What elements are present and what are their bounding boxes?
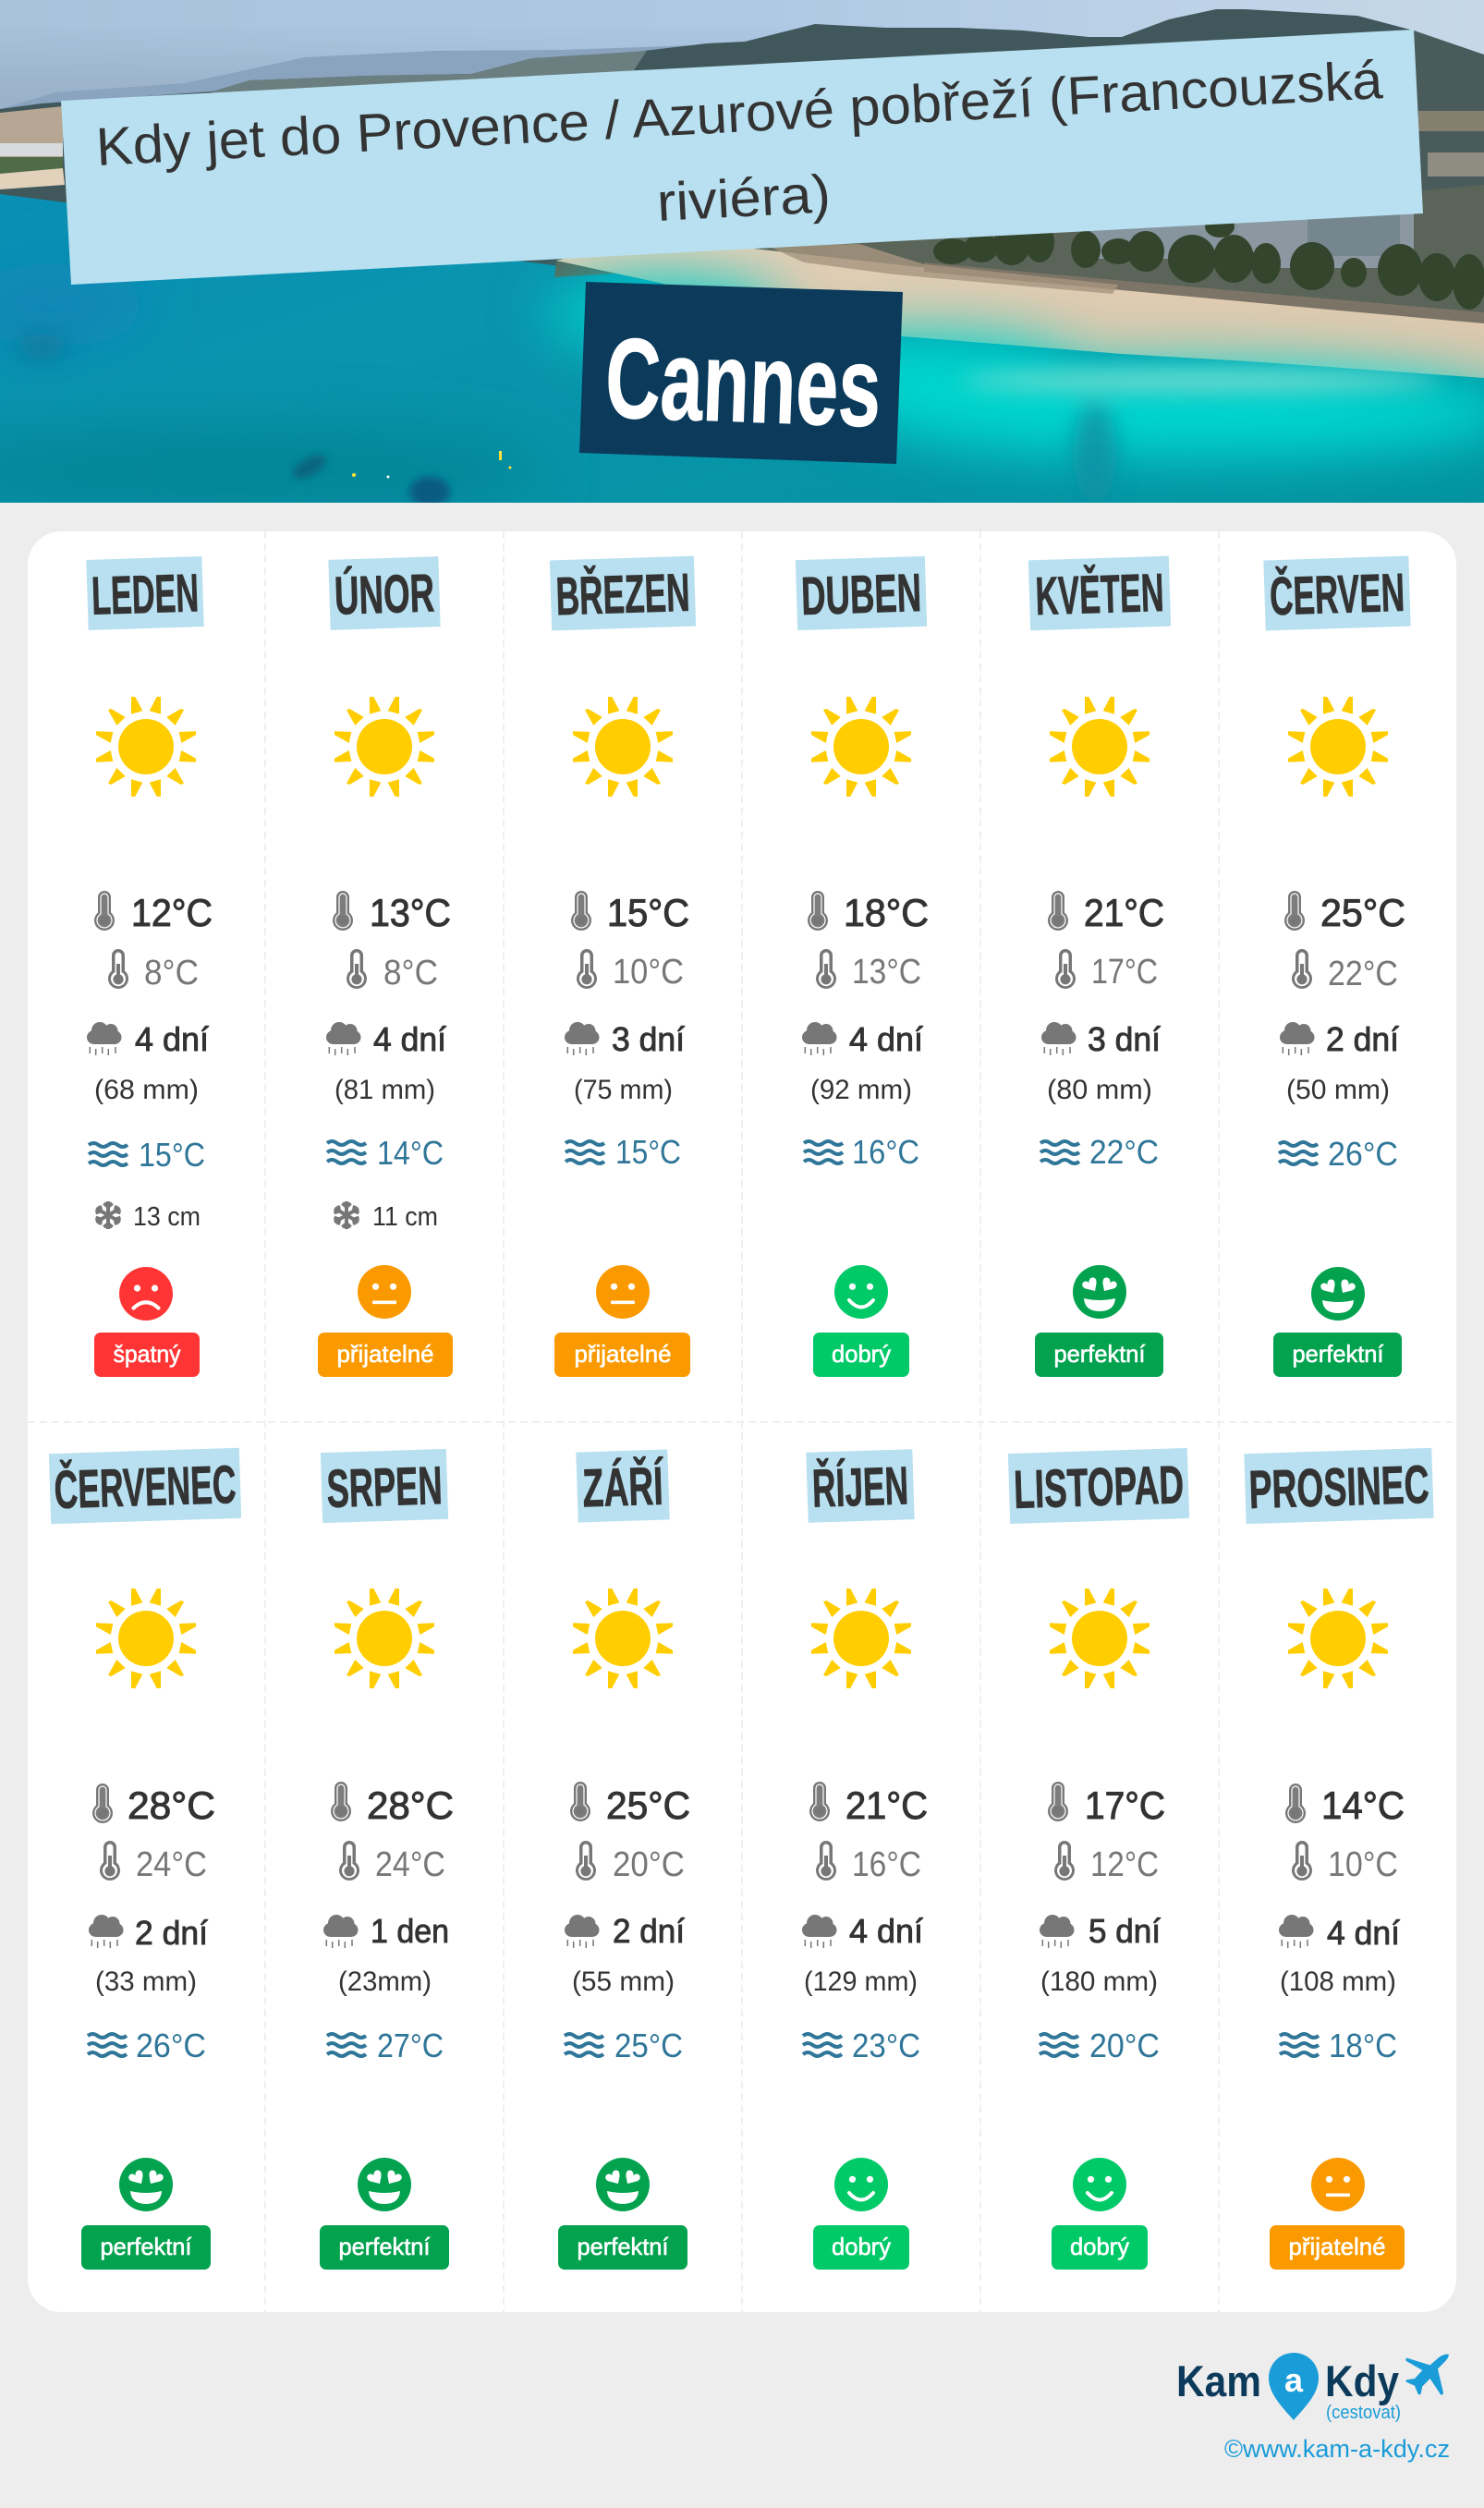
rainfall: (80 mm) xyxy=(1047,1075,1152,1105)
max temperature xyxy=(331,1782,454,1827)
max temperature: 28°C xyxy=(367,1784,454,1827)
icon: sun xyxy=(96,1589,196,1688)
rating badge: perfektní xyxy=(100,2233,192,2260)
heading: ZÁŘÍ xyxy=(576,1449,670,1523)
sea temperature: 23°C xyxy=(852,2027,920,2064)
icon: sun xyxy=(1050,1589,1149,1688)
max temperature: 25°C xyxy=(1320,891,1405,934)
logo word: Kam: Kam xyxy=(1176,2356,1261,2405)
max temperature xyxy=(808,891,929,934)
logo: Kam a Kdy xyxy=(1176,2353,1449,2423)
sea temperature: 22°C xyxy=(1089,1133,1159,1171)
sea temperature xyxy=(88,2027,206,2064)
max temperature xyxy=(809,1782,928,1827)
rainfall: (108 mm) xyxy=(1280,1966,1396,1997)
sea temperature: 25°C xyxy=(614,2027,683,2064)
month panel: ZÁŘÍ xyxy=(558,1449,690,2270)
rating badge xyxy=(813,2225,909,2270)
month panel: LISTOPAD xyxy=(1008,1448,1189,2270)
icon: sun xyxy=(573,1589,673,1688)
sea temperature xyxy=(1040,2027,1160,2064)
icon: sun xyxy=(573,697,673,797)
heading: SRPEN xyxy=(321,1449,448,1523)
rating badge: špatný xyxy=(113,1340,181,1368)
rainy days: 2 dní xyxy=(613,1912,685,1950)
rainy days xyxy=(323,1912,449,1950)
sea temperature: 26°C xyxy=(1328,1135,1398,1173)
icon: sun xyxy=(1288,697,1388,797)
rainy days: 4 dní xyxy=(849,1912,923,1950)
city title: Cannes: Cannes xyxy=(603,315,883,451)
rainfall: (75 mm) xyxy=(574,1075,673,1105)
rainy days xyxy=(326,1020,446,1058)
rating badge: dobrý xyxy=(1070,2233,1129,2260)
sea temperature xyxy=(1279,1135,1398,1173)
heading: BŘEZEN xyxy=(550,556,696,630)
min temperature xyxy=(100,1841,207,1884)
rainy days: 1 den xyxy=(371,1912,449,1950)
rating badge: perfektní xyxy=(577,2233,669,2260)
icon: heart-eyes face xyxy=(1311,1267,1365,1321)
rating badge xyxy=(1273,1333,1402,1377)
month panel: ČERVEN xyxy=(1263,556,1411,1377)
rating badge: perfektní xyxy=(1292,1340,1384,1368)
min temperature: 20°C xyxy=(613,1845,685,1884)
sea temperature: 15°C xyxy=(615,1133,681,1171)
rating badge: perfektní xyxy=(1053,1340,1146,1368)
sea temperature xyxy=(803,2027,920,2064)
min temperature xyxy=(1292,949,1398,993)
rainfall: (50 mm) xyxy=(1286,1075,1390,1105)
month panel: ČERVENEC xyxy=(49,1448,241,2270)
min temperature xyxy=(816,1841,921,1884)
icon: location pin xyxy=(1269,2353,1319,2420)
sea temperature: 20°C xyxy=(1089,2027,1160,2064)
max temperature xyxy=(1048,1782,1165,1827)
rainy days xyxy=(1280,1020,1399,1058)
rainy days: 3 dní xyxy=(1088,1020,1161,1058)
max temperature xyxy=(1048,891,1164,934)
icon: neutral face xyxy=(596,1265,650,1319)
icon: heart-eyes face xyxy=(596,2158,650,2211)
rainy days: 5 dní xyxy=(1089,1912,1161,1950)
rainfall: (33 mm) xyxy=(95,1966,197,1997)
rainfall: (92 mm) xyxy=(810,1075,912,1105)
rainy days: 4 dní xyxy=(849,1020,923,1058)
rainfall: (180 mm) xyxy=(1040,1966,1158,1997)
rainy days: 2 dní xyxy=(1326,1020,1399,1058)
rating badge: přijatelné xyxy=(336,1340,434,1368)
rainy days xyxy=(802,1912,923,1950)
max temperature xyxy=(333,891,451,934)
rating badge xyxy=(1270,2225,1405,2270)
max temperature: 15°C xyxy=(607,891,689,934)
month panel: LEDEN xyxy=(86,556,213,1377)
max temperature xyxy=(1285,1784,1405,1827)
rating badge: dobrý xyxy=(832,1340,891,1368)
logo word: Kdy: Kdy xyxy=(1325,2356,1399,2405)
min temperature xyxy=(347,949,438,992)
heading: LISTOPAD xyxy=(1008,1448,1189,1524)
sea temperature xyxy=(565,2027,683,2064)
max temperature: 13°C xyxy=(370,891,451,934)
heading: ČERVENEC: ČERVENEC xyxy=(54,1455,237,1520)
heading: KVĚTEN: KVĚTEN xyxy=(1035,563,1165,627)
heading: ÚNOR xyxy=(328,556,441,630)
rainfall: (129 mm) xyxy=(804,1966,918,1997)
sea temperature xyxy=(89,1136,205,1174)
max temperature: 17°C xyxy=(1085,1784,1165,1827)
min temperature xyxy=(577,949,684,992)
sea temperature xyxy=(1040,1133,1159,1171)
rainy days xyxy=(89,1914,208,1952)
rating badge xyxy=(554,1333,690,1377)
min temperature: 12°C xyxy=(1090,1845,1159,1884)
heading: BŘEZEN: BŘEZEN xyxy=(555,563,691,627)
heading: LEDEN xyxy=(86,556,204,630)
snow: 11 cm xyxy=(372,1202,438,1232)
month panel: KVĚTEN xyxy=(1028,556,1171,1377)
sea temperature xyxy=(566,1133,681,1171)
heading: ČERVEN xyxy=(1263,556,1411,630)
rating badge xyxy=(1035,1333,1163,1377)
icon: neutral face xyxy=(1311,2158,1365,2211)
max temperature: 18°C xyxy=(844,891,929,934)
rating badge xyxy=(558,2225,687,2270)
icon: neutral face xyxy=(358,1265,411,1319)
max temperature xyxy=(1284,891,1405,934)
heading: ČERVENEC xyxy=(49,1448,241,1524)
sea temperature: 26°C xyxy=(136,2027,206,2064)
rating badge: přijatelné xyxy=(1288,2233,1386,2260)
rating badge: přijatelné xyxy=(575,1340,671,1368)
max temperature xyxy=(570,1782,690,1827)
heading: SRPEN: SRPEN xyxy=(326,1455,444,1519)
heading: ÚNOR: ÚNOR xyxy=(334,563,435,627)
snow xyxy=(333,1201,438,1232)
max temperature: 12°C xyxy=(131,891,213,934)
icon: sun xyxy=(811,697,911,797)
month panel: ÚNOR xyxy=(318,556,453,1377)
month panel: SRPEN xyxy=(320,1449,454,2270)
min temperature: 8°C xyxy=(144,954,199,992)
max temperature: 14°C xyxy=(1321,1784,1405,1827)
heading: LISTOPAD: LISTOPAD xyxy=(1013,1455,1185,1520)
min temperature xyxy=(339,1841,445,1884)
rainy days xyxy=(1041,1020,1161,1058)
rainfall: (81 mm) xyxy=(335,1075,435,1105)
min temperature: 16°C xyxy=(852,1845,921,1884)
icon: sun xyxy=(1288,1589,1388,1688)
min temperature: 24°C xyxy=(375,1845,445,1884)
icon: sun xyxy=(335,1589,434,1688)
rating badge: perfektní xyxy=(338,2233,431,2260)
title line 1: Kdy jet do Provence / Azurové pobřeží (Francouzská xyxy=(94,50,1385,177)
icon: heart-eyes face xyxy=(1073,1265,1126,1319)
icon: heart-eyes face xyxy=(358,2158,411,2211)
sea temperature xyxy=(804,1133,919,1171)
icon: happy face xyxy=(834,1265,888,1319)
min temperature: 10°C xyxy=(613,953,684,992)
max temperature: 21°C xyxy=(1084,891,1164,934)
sea temperature: 15°C xyxy=(139,1136,205,1174)
rating badge xyxy=(1052,2225,1148,2270)
month panel: DUBEN xyxy=(796,556,929,1377)
rating badge xyxy=(813,1333,909,1377)
month panel: PROSINEC xyxy=(1244,1448,1434,2270)
max temperature: 25°C xyxy=(606,1784,690,1827)
rainy days xyxy=(565,1020,685,1058)
min temperature xyxy=(1055,949,1158,992)
max temperature: 21°C xyxy=(845,1784,928,1827)
icon: heart-eyes face xyxy=(119,2158,173,2211)
min temperature: 17°C xyxy=(1091,953,1158,992)
heading: KVĚTEN xyxy=(1028,556,1171,630)
sea temperature xyxy=(1280,2027,1397,2064)
min temperature: 24°C xyxy=(136,1845,207,1884)
month panel: BŘEZEN xyxy=(550,556,696,1377)
snow: 13 cm xyxy=(133,1202,201,1232)
heading: DUBEN xyxy=(796,556,927,630)
sea temperature xyxy=(327,1134,444,1172)
title banner xyxy=(61,30,1423,285)
rating badge xyxy=(320,2225,449,2270)
min temperature: 13°C xyxy=(852,953,921,992)
min temperature xyxy=(1054,1841,1159,1884)
min temperature xyxy=(1292,1841,1398,1884)
min temperature xyxy=(576,1841,685,1884)
logo subtitle: (cestovat) xyxy=(1326,2403,1401,2423)
min temperature: 10°C xyxy=(1328,1845,1398,1884)
min temperature xyxy=(108,949,199,992)
hero photo: Cannes coast xyxy=(0,0,1484,517)
website credit: ©www.kam-a-kdy.cz xyxy=(1224,2435,1450,2463)
icon: happy face xyxy=(834,2158,888,2211)
icon: sun xyxy=(96,697,196,797)
rainfall: (23mm) xyxy=(338,1966,432,1997)
heading: ŘÍJEN: ŘÍJEN xyxy=(811,1455,909,1519)
min temperature xyxy=(816,949,921,992)
sea temperature: 27°C xyxy=(377,2027,444,2064)
min temperature: 8°C xyxy=(383,954,438,992)
max temperature: 28°C xyxy=(128,1784,215,1827)
heading: DUBEN: DUBEN xyxy=(800,563,922,627)
month panel: ŘÍJEN xyxy=(802,1449,928,2270)
sea temperature: 18°C xyxy=(1329,2027,1397,2064)
max temperature xyxy=(571,891,689,934)
rating badge xyxy=(318,1333,453,1377)
min temperature: 22°C xyxy=(1328,955,1398,993)
max temperature xyxy=(94,891,213,934)
rating badge xyxy=(81,2225,211,2270)
icon: happy face xyxy=(1073,2158,1126,2211)
heading: LEDEN: LEDEN xyxy=(91,563,200,627)
rainfall: (68 mm) xyxy=(94,1075,199,1105)
city title: Cannes xyxy=(579,282,903,464)
heading: ZÁŘÍ: ZÁŘÍ xyxy=(582,1456,665,1518)
icon: sad face xyxy=(119,1267,173,1321)
rainy days: 4 dní xyxy=(373,1020,446,1058)
rainy days xyxy=(87,1020,209,1058)
icon: sun xyxy=(335,697,434,797)
title line 2: riviéra) xyxy=(655,164,832,233)
heading: ŘÍJEN xyxy=(806,1449,915,1523)
rainy days xyxy=(802,1020,923,1058)
snow xyxy=(94,1201,201,1232)
icon: airplane xyxy=(1405,2354,1449,2395)
rainy days: 4 dní xyxy=(1327,1914,1400,1952)
rainy days xyxy=(1040,1912,1161,1950)
sea temperature: 16°C xyxy=(852,1133,919,1171)
rainy days xyxy=(565,1912,685,1950)
rainy days xyxy=(1279,1914,1400,1952)
rainy days: 4 dní xyxy=(135,1020,209,1058)
rainy days: 2 dní xyxy=(135,1914,208,1952)
icon: sun xyxy=(1050,697,1149,797)
rating badge xyxy=(94,1333,200,1377)
sea temperature xyxy=(327,2027,444,2064)
rainfall: (55 mm) xyxy=(572,1966,675,1997)
icon: location pin: a xyxy=(1284,2361,1304,2399)
rainy days: 3 dní xyxy=(612,1020,685,1058)
rating badge: dobrý xyxy=(832,2233,891,2260)
sea temperature: 14°C xyxy=(377,1134,444,1172)
icon: sun xyxy=(811,1589,911,1688)
panel: months card xyxy=(28,531,1456,2312)
